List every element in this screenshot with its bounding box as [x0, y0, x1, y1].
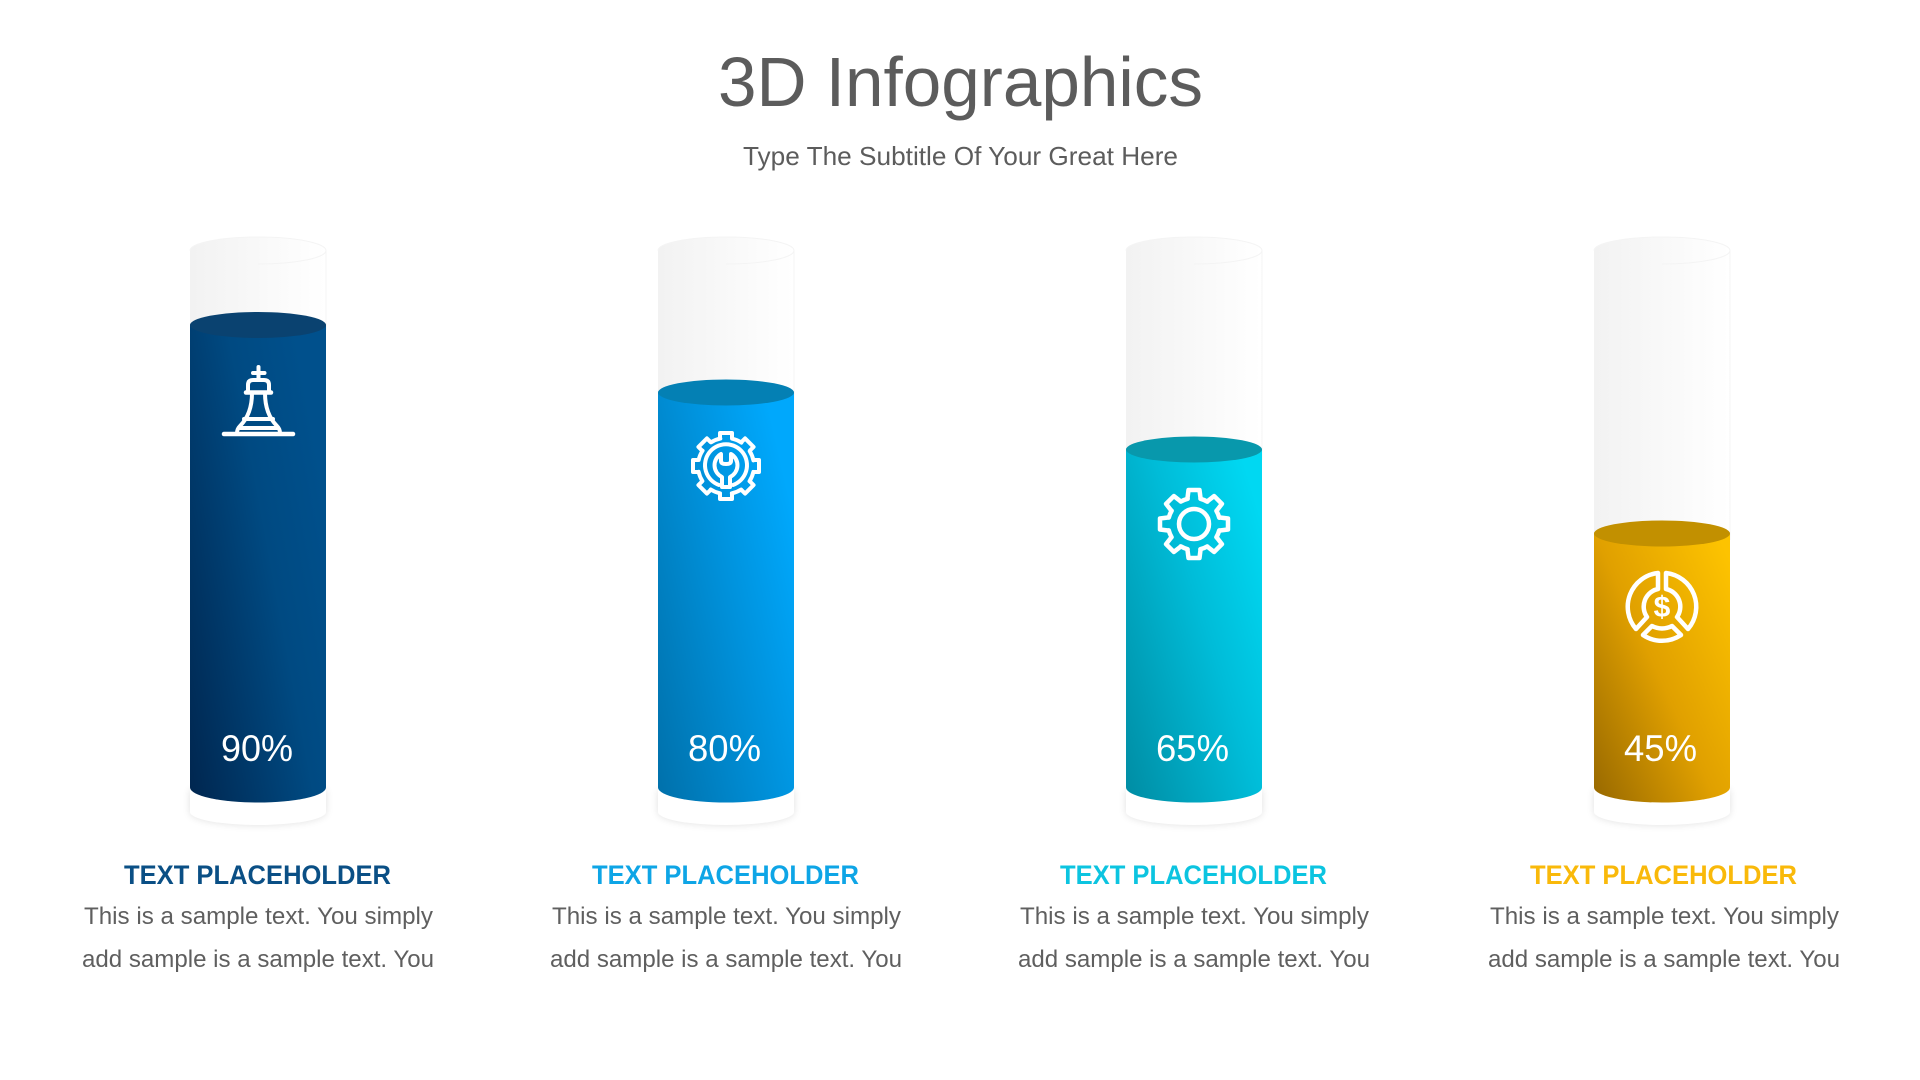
value 45%: 45% — [1624, 728, 1697, 769]
heading: TEXT PLACEHOLDER — [592, 860, 859, 890]
value 65%: 65% — [1156, 728, 1229, 769]
panel: column 2 maintenance 80% — [550, 237, 902, 973]
subtitle: Type The Subtitle Of Your Great Here — [743, 141, 1178, 171]
value 80%: 80% — [688, 728, 761, 769]
body text: add sample is a sample text. You — [82, 946, 434, 973]
panel: column 1 strategy 90% — [82, 237, 434, 973]
heading: TEXT PLACEHOLDER — [124, 860, 391, 890]
cylinder: blue 80% — [658, 237, 794, 825]
body text: add sample is a sample text. You — [1018, 946, 1370, 973]
body text — [1488, 903, 1840, 973]
icon: gear — [1160, 490, 1228, 558]
icon: dollar pie: $ — [1654, 591, 1671, 624]
icon: chess king — [224, 367, 293, 434]
body text — [1018, 903, 1370, 973]
icon: gear with wrench — [693, 433, 759, 499]
heading: TEXT PLACEHOLDER — [1530, 860, 1797, 890]
body text: This is a sample text. You simply — [552, 903, 901, 930]
cylinder: amber 45% — [1594, 237, 1730, 825]
body text: add sample is a sample text. You — [550, 946, 902, 973]
body text — [82, 903, 434, 973]
title: 3D Infographics — [718, 43, 1203, 121]
body text: add sample is a sample text. You — [1488, 946, 1840, 973]
panel: column 4 finance 45% — [1488, 237, 1840, 973]
body text: This is a sample text. You simply — [84, 903, 433, 930]
body text: This is a sample text. You simply — [1490, 903, 1839, 930]
cylinder: cyan 65% — [1126, 237, 1262, 825]
icon: dollar pie — [1628, 573, 1696, 641]
panel: column 3 settings 65% — [1018, 237, 1370, 973]
body text: This is a sample text. You simply — [1020, 903, 1369, 930]
value 90%: 90% — [221, 728, 293, 769]
heading: TEXT PLACEHOLDER — [1060, 860, 1327, 890]
body text — [550, 903, 902, 973]
cylinder: navy 90% — [190, 237, 326, 825]
